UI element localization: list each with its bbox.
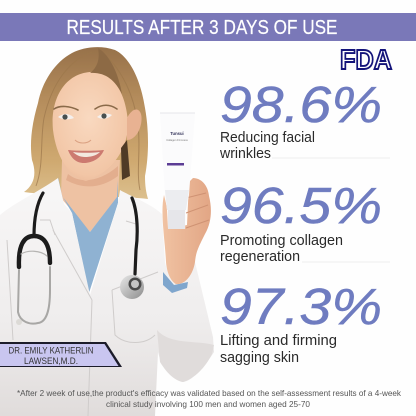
stat: 96.5%: 96.5% [220,177,382,234]
eyebrows [54,105,117,110]
tube [160,113,195,229]
neck shadow [66,166,118,186]
nose [75,140,91,143]
title: RESULTS AFTER 3 DAYS OF USE [66,17,338,39]
mouth [68,150,104,163]
coat body [0,178,214,416]
FDA logo: FDA [340,44,392,75]
stat: 96.5%: Promoting collagen [220,233,343,249]
name banner [0,342,122,367]
footnote: *After 2 week of use,the product's efficacy was validated based on the self-assessment results of a 4-week [17,388,402,398]
stat: 98.6% [219,76,382,162]
chest piece [120,275,144,299]
shirt [58,176,118,293]
stat: 98.6%: Reducing facial [220,130,315,146]
footnote [17,388,402,409]
cuff [163,272,188,293]
tube: Tunsui [170,131,184,136]
hair [24,47,148,199]
forearm and hand [162,178,211,284]
hair strands [36,52,140,190]
stat: 98.6%: 98.6% [220,76,382,133]
stat: 96.5%: regeneration [220,249,300,265]
doctor portrait [0,47,214,416]
stat: 97.3%: 97.3% [220,278,382,335]
eyes [58,113,112,120]
hair shadow [121,140,130,180]
lapels [7,220,158,416]
name banner: DR. EMILY KATHERLIN [8,344,94,356]
hair part [90,48,122,94]
face [53,72,128,181]
stat: 97.3%: Lifting and firming [220,333,337,349]
teeth [73,152,100,157]
stat: 98.6%: wrinkles [219,146,271,162]
footnote: clinical study involving 100 men and women aged 25-70 [106,399,310,409]
ear [127,109,142,140]
header band [0,13,416,41]
tube: Collagen Firmness [166,138,189,142]
neck [61,160,120,232]
name banner: LAWSEN,M.D. [24,355,78,366]
right sleeve shade [157,330,214,382]
stethoscope [16,193,137,325]
stat: 96.5% [220,177,382,265]
stat: 97.3%: sagging skin [220,350,299,366]
stat: 97.3% [220,278,382,366]
fingers [186,193,209,228]
